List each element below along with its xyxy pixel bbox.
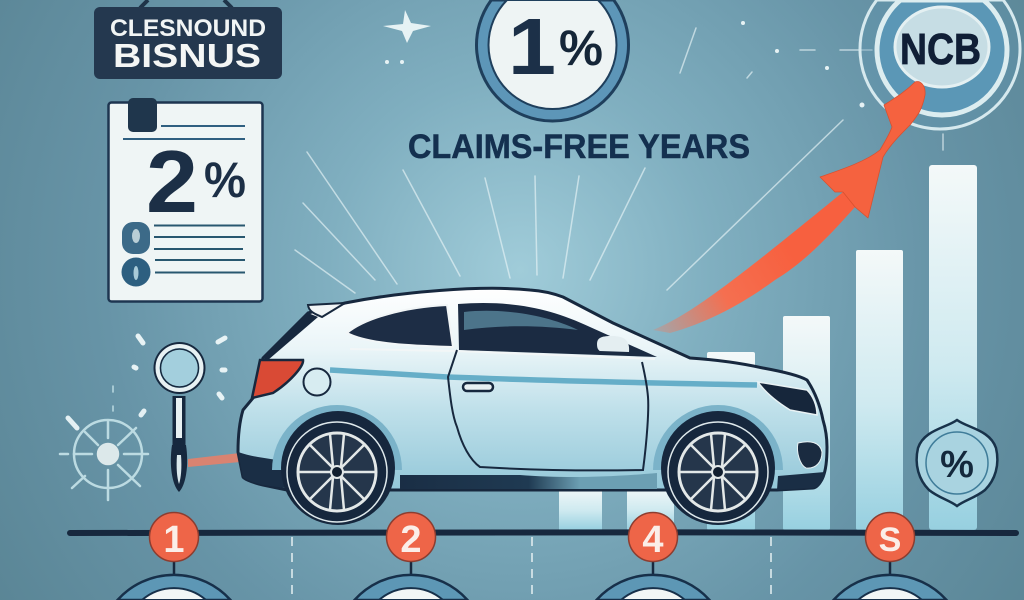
- clipboard panel: [108, 98, 262, 302]
- clipboard percentage: [146, 132, 246, 231]
- magnifying glass icon: [134, 336, 225, 492]
- sign: bonus heading: CLESNOUND: [110, 15, 266, 42]
- side mirror: [597, 336, 629, 352]
- headlight: [758, 382, 817, 415]
- year step 2: [354, 512, 468, 600]
- orange glow trail: [188, 453, 240, 467]
- wheel arches: [272, 405, 402, 470]
- car body: [238, 288, 827, 490]
- dashed step dividers: [292, 537, 771, 600]
- front grille vent: [797, 442, 822, 468]
- NCB badge: NCB: [900, 25, 981, 74]
- NCB badge: [860, 0, 1020, 129]
- door handle: [463, 383, 493, 391]
- car: [238, 288, 827, 525]
- sign: bonus heading: [94, 0, 282, 79]
- timeline: [70, 529, 1016, 536]
- sparkle dots: [741, 21, 864, 108]
- rear window: [347, 305, 453, 347]
- fuel cap: [304, 368, 330, 396]
- top percentage badge: 1: [508, 2, 556, 91]
- clipboard percentage: %: [204, 152, 246, 208]
- percent shield icon: [917, 420, 997, 506]
- tail light: [252, 360, 303, 398]
- front wheel: [661, 411, 775, 525]
- sign: bonus heading: BISNUS: [113, 37, 261, 74]
- rear bumper: [238, 452, 285, 488]
- year step 1: 1: [163, 519, 185, 561]
- bar chart: rising bars: [559, 165, 977, 530]
- character line: [330, 370, 757, 385]
- spoiler: [308, 303, 345, 317]
- percent shield icon: %: [940, 444, 974, 486]
- year step 2: 2: [400, 519, 422, 561]
- year step 4: [596, 512, 710, 600]
- rear wheel: [281, 411, 395, 525]
- red growth arrow: [653, 82, 925, 333]
- top percentage badge: [476, 0, 628, 121]
- clipboard checklist: [122, 222, 245, 286]
- year step 4: 4: [642, 519, 664, 561]
- top percentage badge: %: [559, 20, 603, 76]
- year step S: [834, 512, 946, 600]
- year step S: S: [879, 521, 901, 559]
- radiating light rays: [295, 28, 943, 293]
- sparkle icon: [383, 10, 431, 64]
- clipboard percentage: 2: [146, 132, 198, 231]
- clipboard clip: [128, 98, 157, 132]
- door outline: [448, 350, 648, 470]
- title: CLAIMS-FREE YEARS: [408, 128, 750, 166]
- ship wheel icon: [60, 386, 148, 500]
- sill: [400, 473, 657, 490]
- front window: [458, 303, 657, 357]
- year step 1: [118, 512, 230, 600]
- front bumper: [777, 472, 825, 490]
- rear pillar shadow: [262, 313, 318, 360]
